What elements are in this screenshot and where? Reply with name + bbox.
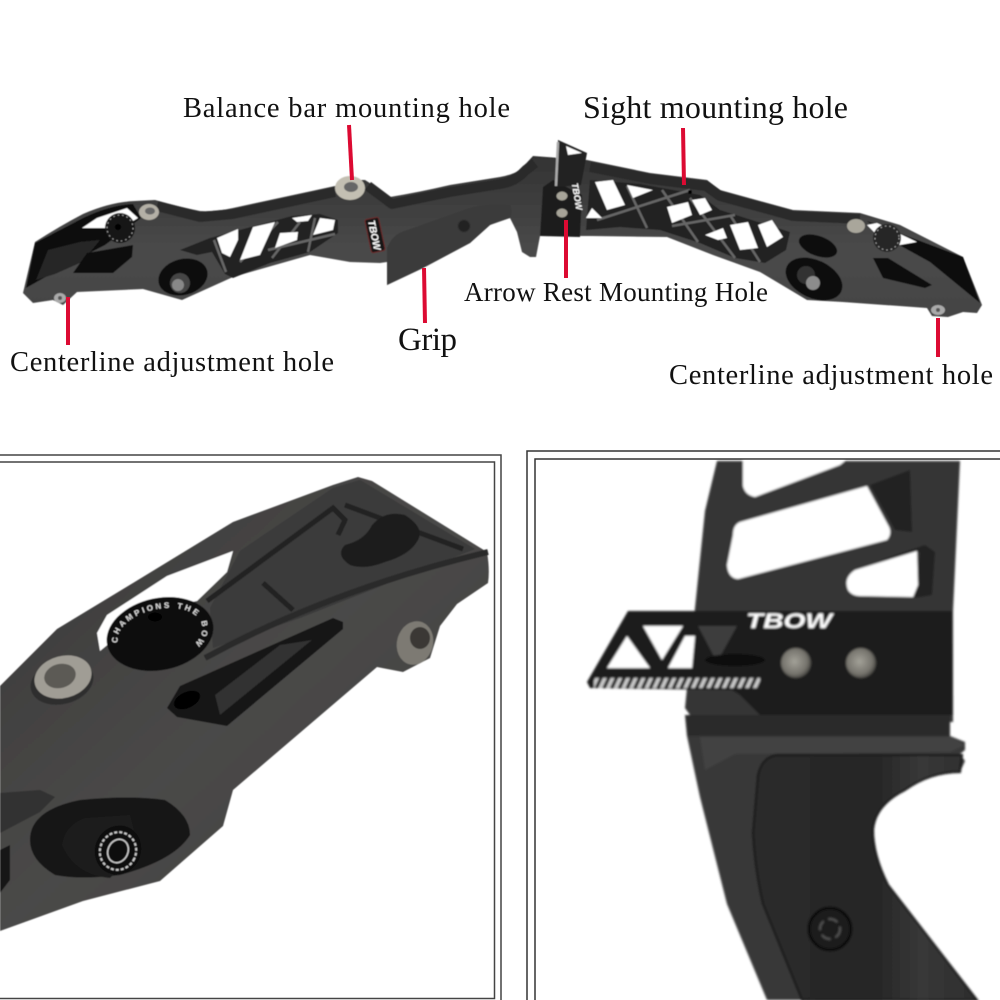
- upper dark bands: [157, 163, 860, 219]
- riser body: [23, 156, 982, 317]
- truss openings left: [217, 215, 335, 260]
- riser openings: [727, 461, 918, 597]
- closeup artwork: [0, 476, 490, 932]
- slit right: [867, 223, 917, 245]
- closeup artwork: [587, 461, 977, 1000]
- plate oval: [705, 654, 765, 666]
- label: grip: Grip: [398, 322, 457, 358]
- panel frame: [0, 455, 501, 1000]
- riser logo: TBOW: [365, 219, 382, 253]
- truss openings right: [586, 180, 783, 250]
- dark opening left: [0, 790, 55, 833]
- upper limb pocket left: [26, 204, 141, 288]
- panel: limb pocket closeup: [0, 454, 502, 1000]
- slot right: [873, 258, 932, 288]
- label: arrow rest: Arrow Rest Mounting Hole: [464, 277, 768, 307]
- label: balance bar: Balance bar mounting hole: [183, 93, 510, 124]
- closeup body: [0, 477, 489, 931]
- lower slot: [167, 618, 343, 726]
- label: centerline right: Centerline adjustment hole: [669, 360, 993, 391]
- grip panel: [753, 755, 977, 1000]
- label: centerline left: Centerline adjustment hole: [10, 347, 334, 378]
- balance bar mounting bush: [335, 176, 365, 200]
- serrated teeth: [594, 678, 760, 688]
- label: sight: Sight mounting hole: [583, 89, 848, 125]
- centerline hole right: [931, 305, 945, 315]
- limb bolt cylinder: [62, 815, 139, 878]
- lower rim bar: [205, 552, 488, 658]
- grip ridge: [685, 715, 950, 736]
- limb bolt right: [873, 224, 901, 252]
- red pointer lines: [68, 125, 938, 357]
- left limb slit: [82, 208, 138, 228]
- limb bolt recess: [30, 798, 190, 878]
- plate triangular openings: [607, 626, 695, 668]
- recess channel: [207, 505, 463, 610]
- champion bolt: [106, 596, 214, 672]
- left limb bolt: [105, 213, 135, 243]
- grip screw: [809, 908, 851, 950]
- left pocket shape: [36, 240, 100, 280]
- ridge highlight: [700, 737, 965, 770]
- plate grey wedge: [698, 626, 737, 662]
- small steel bush: [139, 204, 159, 220]
- truss dark strip: [870, 470, 935, 598]
- plate logo: TBOW: [570, 182, 585, 212]
- truss ribs right: [597, 186, 760, 262]
- steel bushing: [25, 649, 99, 712]
- upper riser: [685, 461, 960, 722]
- TBOW logo: TBOW: [746, 610, 835, 633]
- threaded hole: [392, 617, 438, 669]
- opening edge: [0, 845, 10, 893]
- limb bolt recess right: [779, 249, 849, 309]
- pocket right: [867, 221, 980, 303]
- upper recess: [210, 480, 475, 648]
- lower riser and grip body: [687, 722, 977, 1000]
- limb bolt face: [87, 818, 149, 882]
- sight mounting hole: [688, 190, 692, 194]
- limb bolt recess left: [154, 253, 212, 301]
- grip screw: [458, 220, 470, 232]
- left slot: [73, 245, 133, 273]
- bow riser full view: [23, 140, 982, 317]
- small steel bush right: [847, 219, 865, 233]
- truss right: [586, 180, 790, 263]
- panel: arrow rest closeup: [527, 451, 1000, 1000]
- dark oval: [796, 230, 840, 262]
- panel frame: [527, 451, 1000, 1000]
- truss left: [180, 214, 338, 278]
- keyhole recess: [341, 514, 420, 567]
- white opening: [97, 551, 233, 651]
- arrow rest: [555, 140, 587, 187]
- sight plate: [540, 180, 582, 237]
- mounting bolts: [781, 648, 876, 678]
- grip panel: [387, 204, 512, 285]
- rest plate: [587, 611, 953, 715]
- truss ribs left: [214, 218, 335, 272]
- bolt ring text: CHAMPIONS THE BOW: [111, 601, 208, 648]
- centerline hole left: [54, 293, 66, 303]
- rest mounting bolts: [556, 192, 568, 218]
